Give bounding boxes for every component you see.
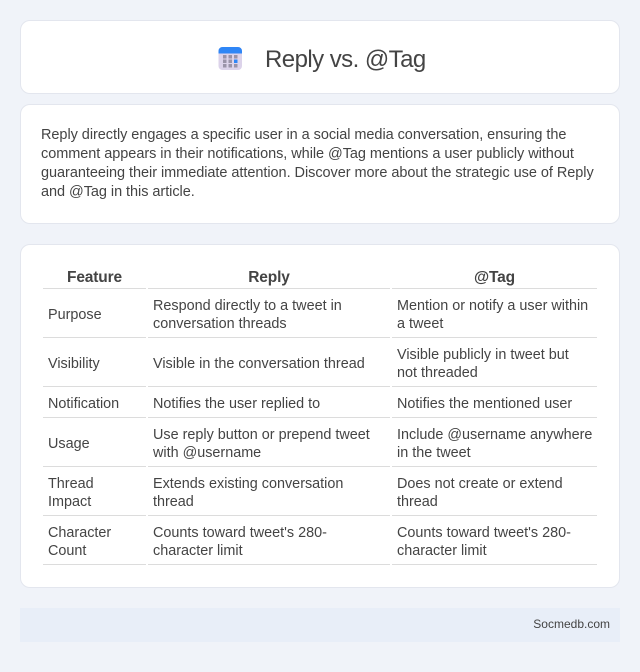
intro text: comment appears in their notifications, while @Tag mentions a user publicly without xyxy=(41,146,574,162)
row: Notification: Notifies the user replied to xyxy=(153,396,320,412)
intro text: guaranteeing their immediate attention. Discover more about the strategic use of Reply xyxy=(41,165,594,181)
intro text: Reply directly engages a specific user in a social media conversation, ensuring the xyxy=(41,127,566,143)
row: Purpose: Purpose xyxy=(48,307,102,323)
row: Purpose: conversation threads xyxy=(153,316,287,332)
row: Visibility: not threaded xyxy=(397,365,478,381)
panel: introduction xyxy=(20,104,620,224)
row: Thread Impact: Impact xyxy=(48,494,91,510)
row: Thread Impact xyxy=(48,476,563,510)
row: Visibility: Visible in the conversation thread xyxy=(153,356,365,372)
row: Thread Impact: thread xyxy=(397,494,438,510)
row: Usage: in the tweet xyxy=(397,445,471,461)
row: Character Count xyxy=(48,525,571,559)
table xyxy=(43,269,597,565)
table header xyxy=(67,269,515,286)
row: Character Count: character limit xyxy=(397,543,487,559)
row: Visibility: Visibility xyxy=(48,356,100,372)
panel: comparison table xyxy=(20,244,620,588)
row: Thread Impact: thread xyxy=(153,494,194,510)
row: Usage xyxy=(48,427,592,461)
row: Usage: Usage xyxy=(48,436,90,452)
intro text: and @Tag in this article. xyxy=(41,184,195,200)
footer credit: Socmedb.com xyxy=(533,617,610,631)
row: Character Count: Character xyxy=(48,525,111,541)
table header: @Tag xyxy=(474,269,515,286)
row: Thread Impact: Does not create or extend xyxy=(397,476,563,492)
row: Character Count: Counts toward tweet's 280- xyxy=(153,525,327,541)
intro text xyxy=(41,127,594,200)
row: Visibility xyxy=(48,347,569,381)
row: Notification: Notification xyxy=(48,396,119,412)
row: Thread Impact: Extends existing conversation xyxy=(153,476,343,492)
row: Purpose: Mention or notify a user within xyxy=(397,298,588,314)
table header: Reply xyxy=(248,269,290,286)
row: Thread Impact: Thread xyxy=(48,476,94,492)
row: Purpose: Respond directly to a tweet in xyxy=(153,298,342,314)
row: Purpose xyxy=(48,298,588,332)
title: Reply vs. @Tag xyxy=(265,46,426,73)
row: Visibility: Visible publicly in tweet but xyxy=(397,347,569,363)
row: Character Count: character limit xyxy=(153,543,243,559)
icon: calendar xyxy=(218,47,242,70)
row: Character Count: Counts toward tweet's 280- xyxy=(397,525,571,541)
table header: Feature xyxy=(67,269,122,286)
row: Character Count: Count xyxy=(48,543,86,559)
row: Notification xyxy=(48,396,572,412)
row: Notification: Notifies the mentioned user xyxy=(397,396,572,412)
row: Usage: Include @username anywhere xyxy=(397,427,592,443)
row: Purpose: a tweet xyxy=(397,316,443,332)
footer bar xyxy=(20,608,620,642)
row: Usage: Use reply button or prepend tweet xyxy=(153,427,370,443)
row: Usage: with @username xyxy=(153,445,261,461)
title panel xyxy=(20,20,620,94)
